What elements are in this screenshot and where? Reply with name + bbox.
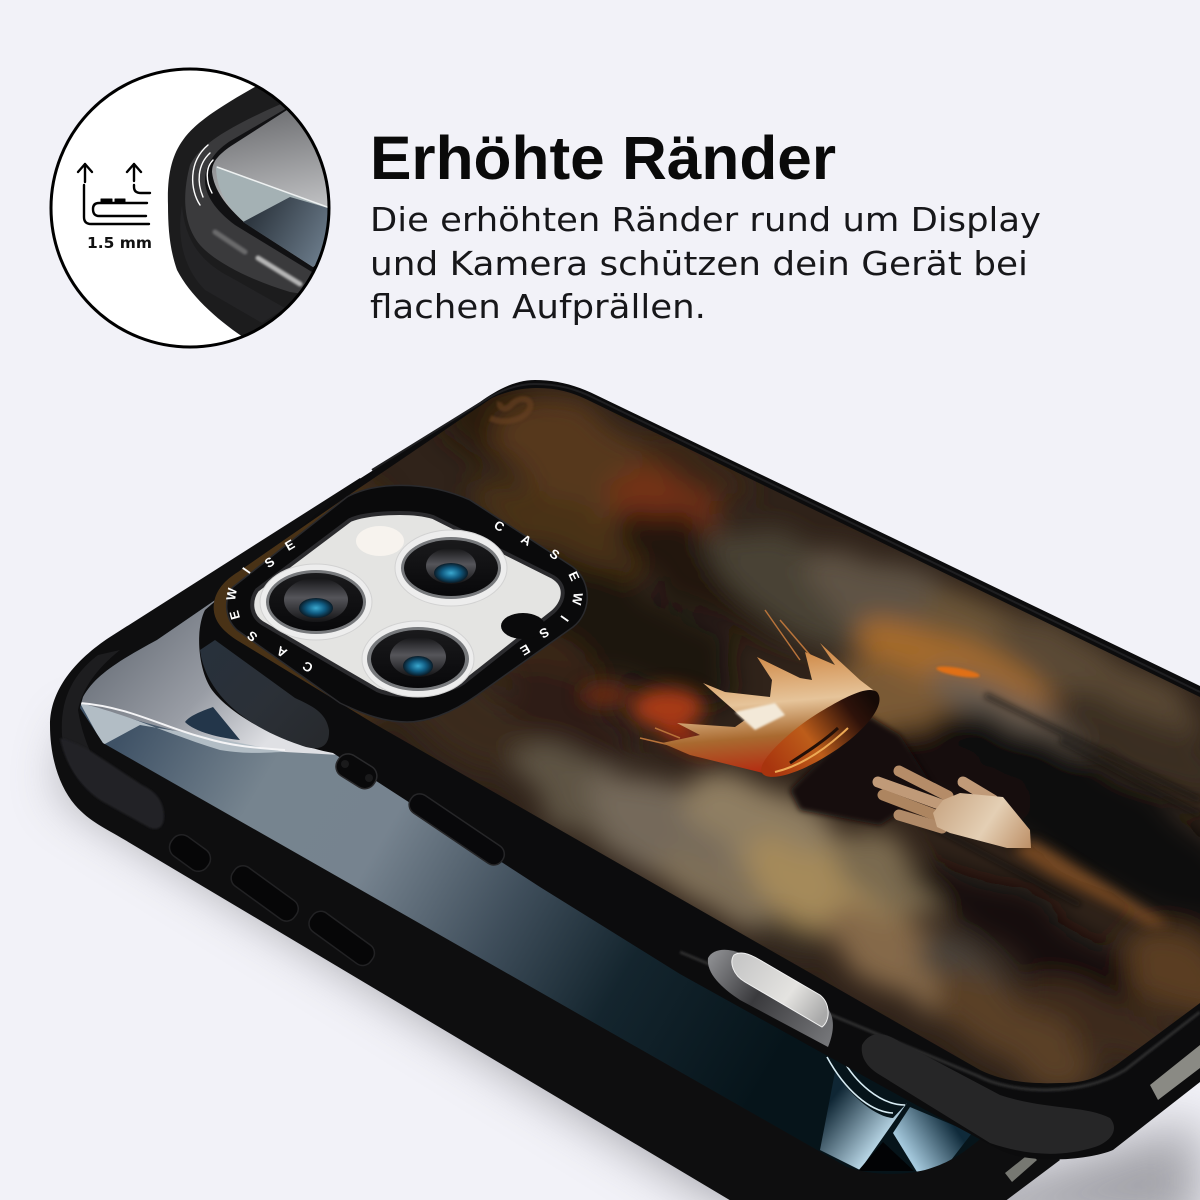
ring lettering CASEWISE: S xyxy=(244,628,260,645)
ring lettering CASEWISE xyxy=(223,517,586,676)
lens left xyxy=(260,564,372,640)
swirl mark near the top corner xyxy=(490,399,530,421)
description text: Die erhöhten Ränder rund um Display xyxy=(370,201,1041,239)
bottom corner pill xyxy=(862,1034,1114,1154)
camera side pill xyxy=(200,640,329,748)
impact arcs xyxy=(193,145,213,205)
ring lettering CASEWISE: E xyxy=(565,569,583,583)
lens top xyxy=(395,530,507,606)
front phone case xyxy=(199,380,1200,1159)
description text xyxy=(370,201,1041,326)
back phone screen xyxy=(80,600,980,1174)
back phone volume down xyxy=(305,907,378,969)
ring lettering CASEWISE: I xyxy=(558,613,572,624)
ring lettering CASEWISE: W xyxy=(223,586,240,602)
heading: Erhöhte Ränder xyxy=(370,124,836,192)
dark brush streaks xyxy=(920,695,1200,905)
wallpaper light beams xyxy=(820,1057,972,1172)
back phone case xyxy=(50,478,1060,1200)
back phone port xyxy=(1005,1153,1037,1182)
case artwork: crown and hand painting xyxy=(214,388,1200,1084)
icon: raised edge diagram xyxy=(78,164,150,224)
lower rim highlight xyxy=(680,952,1200,1090)
painted clouds xyxy=(214,388,1200,1084)
ring lettering CASEWISE: S xyxy=(262,553,278,571)
crown xyxy=(640,610,880,777)
flash xyxy=(356,526,404,556)
mute switch xyxy=(332,750,381,793)
orange brush mark xyxy=(936,664,980,680)
ring lettering CASEWISE: E xyxy=(282,536,298,554)
hand xyxy=(878,771,1031,848)
back case corner pill xyxy=(60,738,164,829)
phone corner close-up xyxy=(168,86,328,336)
camera island xyxy=(252,513,563,695)
ring lettering CASEWISE: E xyxy=(226,609,243,621)
back phone mute button xyxy=(165,830,215,876)
ring lettering CASEWISE: C xyxy=(491,517,508,535)
wrist streak xyxy=(1012,840,1170,925)
power button xyxy=(405,790,508,869)
magnified corner callout xyxy=(50,68,330,348)
description text: flachen Aufprällen. xyxy=(370,288,706,326)
measurement label: 1.5 mm xyxy=(87,234,152,252)
right side port xyxy=(1150,1045,1200,1100)
ring lettering CASEWISE: W xyxy=(569,591,586,607)
ring lettering CASEWISE: I xyxy=(239,565,253,576)
ring lettering CASEWISE: C xyxy=(299,658,316,676)
red glow behind crown xyxy=(580,685,719,760)
ring lettering CASEWISE: S xyxy=(536,624,552,642)
description text: und Kamera schützen dein Gerät bei xyxy=(370,245,1028,283)
ring lettering CASEWISE: E xyxy=(517,641,533,659)
back phone volume up xyxy=(227,862,302,925)
silver action button xyxy=(708,950,833,1047)
ring lettering CASEWISE: A xyxy=(518,531,535,549)
phone shadow xyxy=(60,720,1200,1200)
dark smoke at crown xyxy=(790,715,935,825)
microphone hole xyxy=(501,613,545,639)
ring lettering CASEWISE: S xyxy=(547,546,563,563)
lens bottom xyxy=(362,621,474,697)
camera ring xyxy=(223,485,587,722)
upper rim highlight xyxy=(372,384,1200,692)
ring lettering CASEWISE: A xyxy=(273,643,290,661)
